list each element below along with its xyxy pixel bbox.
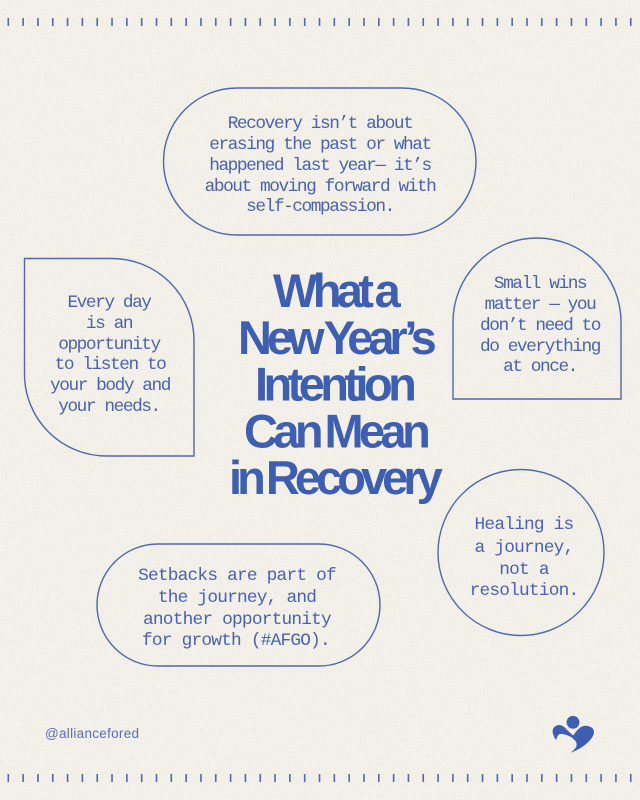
panel: circle, healing: a journey, <box>475 538 573 558</box>
panel: circle, healing: Healing is <box>475 515 574 535</box>
panel: left leaf, every day: Every day <box>67 293 152 313</box>
panel: left leaf, every day <box>24 258 194 456</box>
panel: right arch, small wins <box>453 238 621 399</box>
panel: left leaf, every day: is an <box>86 314 133 334</box>
panel: circle, healing: resolution. <box>470 581 578 601</box>
panel: right arch, small wins: at once. <box>503 357 577 377</box>
social handle: @alliancefored <box>45 726 139 741</box>
title: Can Mean <box>244 404 428 458</box>
panel: left leaf, every day: opportunity <box>58 335 162 355</box>
panel: left leaf, every day: your needs. <box>58 397 160 417</box>
panel: left leaf, every day: your body and <box>50 376 171 396</box>
title: New Year’s <box>238 311 436 364</box>
panel: right arch, small wins: matter — you <box>485 295 596 315</box>
panel: bottom pill, setbacks <box>97 544 380 666</box>
panel: top pill, recovery message: erasing the past or what <box>209 135 431 155</box>
panel: bottom pill, setbacks: Setbacks are part of <box>138 566 336 586</box>
panel: top pill, recovery message <box>164 88 476 235</box>
panel: bottom pill, setbacks: the journey, and <box>158 588 316 608</box>
title: What a <box>273 264 402 317</box>
panel: circle, healing <box>438 470 604 636</box>
title <box>229 264 443 504</box>
panel: circle, healing: not a <box>499 560 550 580</box>
title: in Recovery <box>229 451 443 504</box>
panel: bottom pill, setbacks: for growth (#AFGO). <box>142 631 330 651</box>
panel: top pill, recovery message: happened last year— it’s <box>209 156 432 176</box>
panel: right arch, small wins: do everything <box>480 337 601 357</box>
panel: left leaf, every day: to listen to <box>55 355 166 375</box>
panel: right arch, small wins: don’t need to <box>480 316 601 336</box>
icon: alliance logo <box>553 716 594 753</box>
panel: top pill, recovery message: self-compassion. <box>246 197 394 217</box>
panel: right arch, small wins: Small wins <box>494 274 587 294</box>
title: Intention <box>255 358 414 410</box>
panel: bottom pill, setbacks: another opportunity <box>143 610 332 630</box>
panel: top pill, recovery message: Recovery isn’t about <box>228 114 412 134</box>
panel: top pill, recovery message: about moving forward with <box>205 177 436 197</box>
